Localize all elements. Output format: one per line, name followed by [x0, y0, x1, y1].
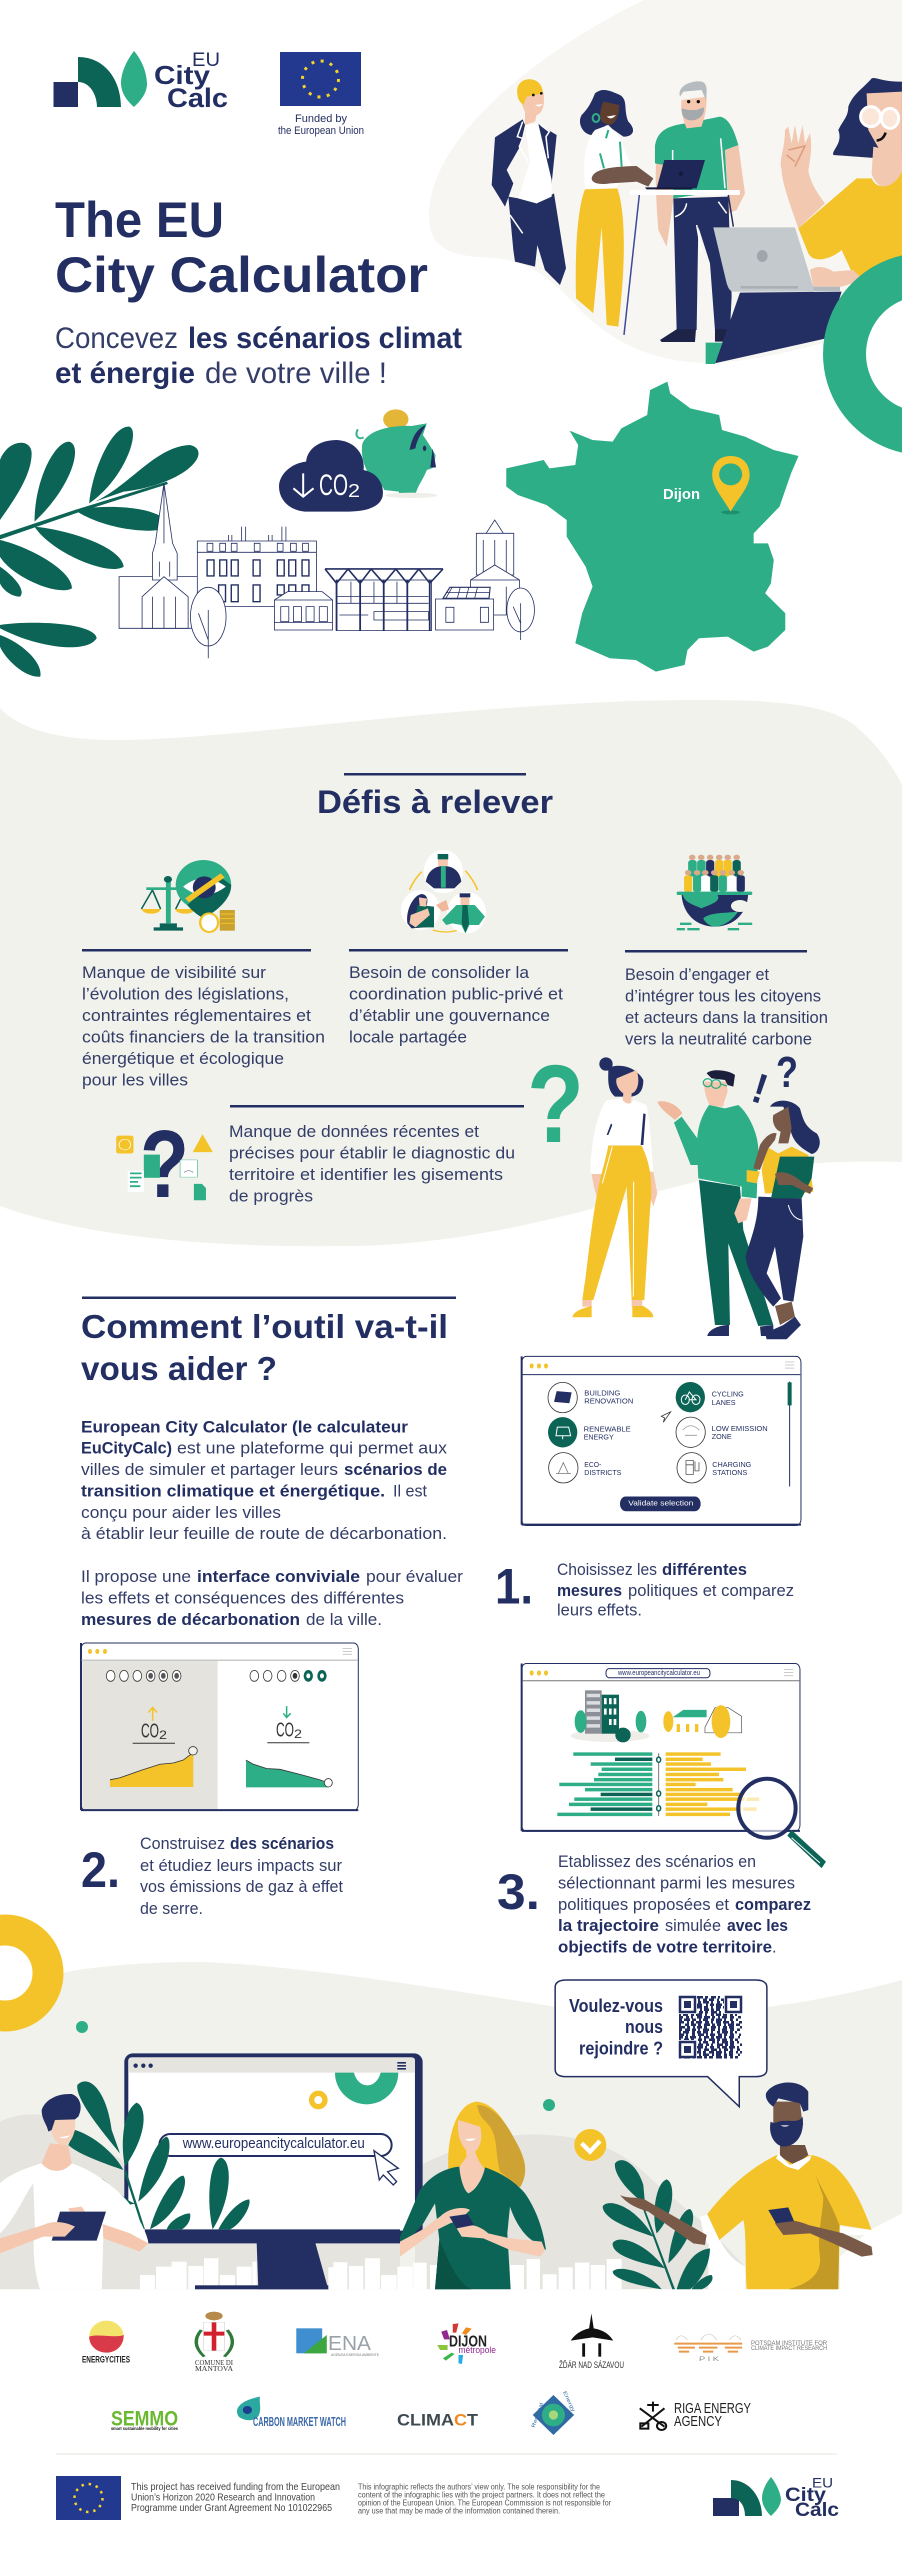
title: City Calculator	[55, 247, 428, 303]
challenge 1: énergétique et écologique	[82, 1050, 284, 1068]
icon: citizens on a globe	[677, 855, 752, 930]
partner logo: Energy Cities	[82, 2321, 130, 2364]
subtitle: de votre ville !	[205, 357, 387, 390]
monitor: website	[124, 2053, 423, 2289]
icon: three collaborators	[401, 850, 486, 933]
challenge 3: vers la neutralité carbone	[625, 1030, 812, 1048]
step 3: comparez	[735, 1896, 811, 1914]
step 1: différentes	[662, 1561, 747, 1579]
browser window: scenario comparison: CO	[141, 1720, 159, 1742]
wave background: footer scene	[0, 1962, 902, 2289]
person: woman with phone	[400, 2102, 546, 2289]
wave background: challenges	[0, 700, 902, 1246]
partner logo: Žďár nad Sázavou	[559, 2313, 624, 2370]
logo: EU City Calc footer	[713, 2474, 839, 2521]
text block: introduction: conçu pour aider les villes	[81, 1504, 281, 1522]
text block: introduction: villes de simuler et partager leurs	[81, 1461, 338, 1479]
man in green t-shirt	[655, 81, 745, 342]
browser window: measure selection: Validate selection	[628, 1498, 693, 1508]
partner logo: CLIMACT: CLIMACT	[397, 2410, 479, 2430]
icon: big question mark: ?	[527, 1043, 584, 1166]
text block: introduction: EuCityCalc)	[81, 1440, 172, 1458]
icon: charging stations	[677, 1453, 706, 1483]
challenge 3: et acteurs dans la transition	[625, 1009, 828, 1027]
challenge 4	[116, 1105, 524, 1218]
EU flag with funded by caption: Funded by	[295, 113, 347, 125]
challenge 2	[349, 850, 568, 1046]
disclaimer	[358, 2482, 611, 2515]
person: man with phone	[620, 2082, 873, 2289]
step 1: 1.	[495, 1558, 533, 1614]
browser window: measure selection: ECO-	[584, 1460, 602, 1469]
browser window: scenario comparison: 2	[159, 1728, 167, 1742]
icon: renewable energy	[548, 1417, 577, 1447]
disclaimer: opinion of the European Union. The European Commission is not responsible for	[358, 2498, 611, 2507]
white skyline bars	[140, 2258, 622, 2289]
step 2: vos émissions de gaz à effet	[140, 1878, 343, 1896]
icon: piggy bank and CO2 cloud: CO	[319, 469, 348, 502]
table legs	[624, 195, 639, 335]
plant: right	[603, 2160, 713, 2289]
text block: interface: mesures de décarbonation	[81, 1611, 300, 1629]
heading: Défis à relever: Défis à relever	[317, 784, 553, 820]
trees	[190, 587, 226, 646]
manor house	[197, 527, 333, 630]
text block: interface: les effets et conséquences des différentes	[81, 1590, 404, 1608]
covered market	[325, 569, 443, 631]
browser window: measure selection: CYCLING	[712, 1390, 744, 1399]
step 3: politiques proposées et	[558, 1896, 729, 1914]
decorative ring: green	[844, 274, 902, 434]
icon: piggy bank and CO2 cloud	[279, 409, 437, 512]
white ground right	[708, 2213, 902, 2289]
speech bubble: join us: Voulez-vous	[569, 1996, 663, 2016]
title: The EU	[55, 192, 224, 248]
browser window: measure selection: BUILDING	[584, 1388, 620, 1397]
decorative dot	[76, 2021, 88, 2033]
belltower and solar building	[436, 520, 519, 630]
step 2: et étudiez leurs impacts sur	[140, 1857, 343, 1875]
disclaimer: any use that may be made of the information contained therein.	[358, 2506, 560, 2515]
browser window: measure selection: LOW EMISSION	[712, 1424, 768, 1433]
label: website address: www.europeancitycalculator.eu	[182, 2135, 365, 2152]
challenge 2: coordination public-privé et	[349, 986, 563, 1004]
icon: navy exclamation mark: !	[747, 1064, 773, 1113]
browser window: trajectory bars	[522, 1663, 826, 1868]
partner logo: Carbon Market Watch	[237, 2397, 346, 2429]
step 3	[497, 1853, 811, 1956]
woman in white top	[572, 1057, 657, 1317]
challenge 1: coûts financiers de la transition	[82, 1028, 325, 1046]
decorative dot	[543, 2099, 555, 2111]
challenge 4: de progrès	[229, 1188, 313, 1206]
step 1: politiques et comparez	[628, 1582, 794, 1600]
step 3: Etablissez des scénarios en	[558, 1853, 756, 1871]
woman with folder	[746, 1101, 820, 1339]
step 1: leurs effets.	[557, 1602, 642, 1620]
step 3: simulée	[665, 1917, 721, 1935]
title	[55, 192, 428, 303]
browser window: measure selection: STATIONS	[712, 1468, 747, 1477]
icon: pointer	[661, 1412, 671, 1422]
illustration: three people wondering	[527, 1043, 820, 1339]
funding statement	[131, 2481, 340, 2514]
challenge 2: locale partagée	[349, 1028, 467, 1046]
partner logo: ENA	[296, 2328, 379, 2357]
icon: question mark and data symbols	[116, 1111, 213, 1218]
icon: mouse cursor	[374, 2151, 398, 2185]
icon: low emission zone	[676, 1417, 705, 1447]
text block: introduction: European City Calculator (le calculateur	[81, 1418, 409, 1436]
chart: diverging bars	[557, 1752, 759, 1816]
illustration: city line art	[119, 483, 534, 658]
challenge 4: précises pour établir le diagnostic du	[229, 1144, 515, 1162]
text block: introduction: Il est	[393, 1482, 427, 1500]
icon: green building and tree	[571, 1690, 649, 1742]
heading: Comment l'outil va-t-il vous aider ?: vous aider ?	[81, 1350, 277, 1387]
browser window: measure selection: CHARGING	[712, 1460, 751, 1469]
partner logo: Comune di Mantova	[195, 2312, 234, 2373]
speech bubble: join us: rejoindre ?	[579, 2038, 663, 2058]
partner logo: Comune di Mantova: MANTOVA	[195, 2365, 233, 2373]
browser window: measure selection: RENOVATION	[584, 1397, 633, 1406]
logo: EU City Calc: Calc	[167, 83, 228, 113]
footer rule	[56, 2453, 837, 2455]
icon: navy question mark: ?	[776, 1048, 798, 1097]
icon: question mark and data symbols: ?	[140, 1111, 189, 1218]
browser window: scenario comparison: CO	[276, 1720, 294, 1742]
partner logo: PIK: POTSDAM INSTITUTE FOR	[751, 2341, 828, 2347]
text block: introduction: transition climatique et énergétique.	[81, 1482, 385, 1500]
partner logo: ENA: AGENZIA ENERGIA AMBIENTE	[331, 2352, 379, 2357]
subtitle: Concevez	[55, 322, 178, 355]
icon: location pin	[712, 456, 750, 514]
step 3: 3.	[497, 1864, 540, 1920]
partner logo: ENA: ENA	[328, 2333, 372, 2355]
challenge 1: Manque de visibilité sur	[82, 964, 267, 982]
EU flag with funded by caption: the European Union	[278, 125, 364, 137]
step 2: des scénarios	[230, 1835, 334, 1853]
browser window: measure selection: DISTRICTS	[584, 1468, 621, 1477]
seated woman with glasses	[706, 78, 902, 364]
label: Dijon: Dijon	[663, 486, 700, 503]
browser window: measure selection: RENEWABLE	[584, 1424, 631, 1433]
text block: introduction: scénarios de	[344, 1461, 447, 1479]
icon: eco-districts	[549, 1453, 578, 1483]
icon: scale and eye	[141, 860, 235, 932]
logo: EU City Calc footer: City	[785, 2485, 826, 2506]
step 3: avec les	[727, 1917, 788, 1935]
partner logo: SEMMO: smart sustainable mobility for cities	[111, 2426, 178, 2431]
step 2	[81, 1835, 343, 1918]
partner logo: SEMMO: SEMMO	[111, 2408, 178, 2430]
text block: interface: Il propose une	[81, 1568, 191, 1586]
EU flag with funded by caption	[278, 52, 364, 137]
icon: building renovation	[548, 1382, 577, 1413]
browser window: measure selection: ENERGY	[584, 1433, 614, 1442]
challenge 1: contraintes réglementaires et	[82, 1007, 311, 1025]
icon: magnifying glass	[738, 1779, 826, 1868]
disclaimer: content of the infographic lies with the project partners. It does not reflect the	[358, 2490, 605, 2499]
EU flag: footer	[56, 2476, 121, 2520]
man in suit	[492, 79, 566, 285]
challenge 3: d’intégrer tous les citoyens	[625, 988, 821, 1006]
partner logo: PIK: P I K	[699, 2357, 719, 2363]
partner logo: Energy Cities: ENERGYCITIES	[82, 2354, 130, 2364]
logo: EU City Calc footer: Calc	[795, 2500, 839, 2521]
step 1	[495, 1558, 794, 1620]
partner logo: PIK	[674, 2334, 828, 2363]
speech bubble: join us: nous	[625, 2017, 663, 2037]
subtitle	[55, 322, 462, 390]
subtitle: et énergie	[55, 357, 195, 390]
partner logo: Riga Energy Agency	[640, 2400, 751, 2430]
step 3: sélectionnant parmi les mesures	[558, 1874, 795, 1892]
challenge 2: d’établir une gouvernance	[349, 1007, 550, 1025]
logo: EU City Calc: City	[154, 60, 211, 90]
decorative ring: yellow	[0, 1930, 48, 2016]
text block: interface	[81, 1568, 464, 1629]
challenge 3: Besoin d’engager et	[625, 966, 769, 984]
subtitle: les scénarios climat	[188, 322, 462, 355]
text block: interface: interface conviviale	[197, 1568, 360, 1586]
step 3: la trajectoire	[558, 1917, 659, 1935]
person: man with tablet	[0, 2094, 148, 2289]
challenge 2: Besoin de consolider la	[349, 964, 530, 982]
step 2: de serre.	[140, 1900, 203, 1918]
browser window: scenario comparison	[81, 1643, 358, 1811]
challenge 1: pour les villes	[82, 1072, 188, 1090]
partner logo: regional energy transfer agency: Regional	[531, 2402, 545, 2429]
funding statement: Programme under Grant Agreement No 101022965	[131, 2502, 332, 2514]
branch: leaves	[0, 427, 199, 677]
partner logo: Comune di Mantova: COMUNE DI	[195, 2359, 234, 2367]
map: France	[506, 382, 799, 672]
partner logo: Carbon Market Watch: CARBON MARKET WATCH	[253, 2414, 346, 2429]
challenge 3	[625, 855, 828, 1048]
text block: introduction	[81, 1418, 448, 1543]
browser window: measure selection: LANES	[712, 1398, 736, 1407]
step 1: mesures	[557, 1582, 622, 1600]
logo: EU City Calc: EU	[192, 50, 220, 71]
badge: yellow check	[574, 2129, 606, 2161]
partner logo: Dijon métropole	[437, 2323, 496, 2364]
hills: scene background right	[415, 2134, 745, 2289]
logo: EU City Calc footer: EU	[812, 2474, 833, 2490]
icon: cycling lanes	[676, 1382, 705, 1412]
partner logo: Žďár nad Sázavou: ŽĎÁR NAD SÁZAVOU	[559, 2360, 624, 2370]
challenge 4: Manque de données récentes et	[229, 1123, 479, 1141]
disclaimer: This infographic reflects the authors’ view only. The sole responsibility for the	[358, 2482, 600, 2491]
partner logo: Riga Energy Agency: RIGA ENERGY	[674, 2400, 751, 2417]
plant: behind monitor	[68, 2081, 250, 2229]
heading: Comment l'outil va-t-il vous aider ?: Comment l’outil va-t-il	[81, 1308, 448, 1345]
partner logo: regional energy transfer agency	[531, 2390, 576, 2435]
partner logo: Riga Energy Agency: AGENCY	[674, 2413, 722, 2430]
text block: interface: pour évaluer	[366, 1568, 464, 1586]
laptop on table	[630, 160, 740, 227]
text block: introduction: à établir leur feuille de route de décarbonation.	[81, 1525, 447, 1543]
icon: piggy bank and CO2 cloud: 2	[348, 481, 360, 501]
text block: interface: de la ville.	[306, 1611, 382, 1629]
challenge 1	[82, 860, 325, 1090]
funding statement: This project has received funding from the European	[131, 2481, 340, 2493]
browser window: measure selection	[522, 1356, 801, 1526]
woman in yellow trousers	[576, 90, 653, 327]
partner logo: Dijon métropole: métropole	[458, 2345, 496, 2355]
church	[119, 483, 210, 628]
step 3: .	[772, 1938, 777, 1956]
partner logo: regional energy transfer agency: Energy	[561, 2390, 576, 2413]
icon: yellow trees and houses	[663, 1705, 742, 1738]
text block: introduction: est une plateforme qui permet aux	[177, 1440, 448, 1458]
step 2: Construisez	[140, 1835, 225, 1853]
speech bubble: join us	[555, 1980, 767, 2107]
step 1: Choisissez les	[557, 1561, 657, 1579]
challenge 1: l’évolution des législations,	[82, 986, 289, 1004]
browser window: trajectory bars: www.europeancitycalculator.eu	[617, 1670, 700, 1677]
background blob: hero	[429, 0, 902, 363]
logo: EU City Calc	[54, 50, 228, 113]
hills: scene background left	[0, 2114, 400, 2289]
QR code	[679, 1997, 742, 2057]
step 2: 2.	[81, 1842, 120, 1898]
partner logo: Dijon métropole: DIJON	[449, 2334, 487, 2350]
step 3: objectifs de votre territoire	[558, 1938, 772, 1956]
partner logo: PIK: CLIMATE IMPACT RESEARCH	[751, 2346, 827, 2352]
browser window: measure selection: ZONE	[712, 1432, 732, 1441]
browser window: scenario comparison: 2	[294, 1727, 302, 1741]
illustration: team around a table	[492, 78, 902, 364]
challenge 4: territoire et identifier les gisements	[229, 1166, 503, 1184]
funding statement: Union’s Horizon 2020 Research and Innovation	[131, 2492, 315, 2504]
heading: Comment l'outil va-t-il vous aider ?	[81, 1296, 456, 1387]
man with green glasses	[657, 1070, 773, 1336]
